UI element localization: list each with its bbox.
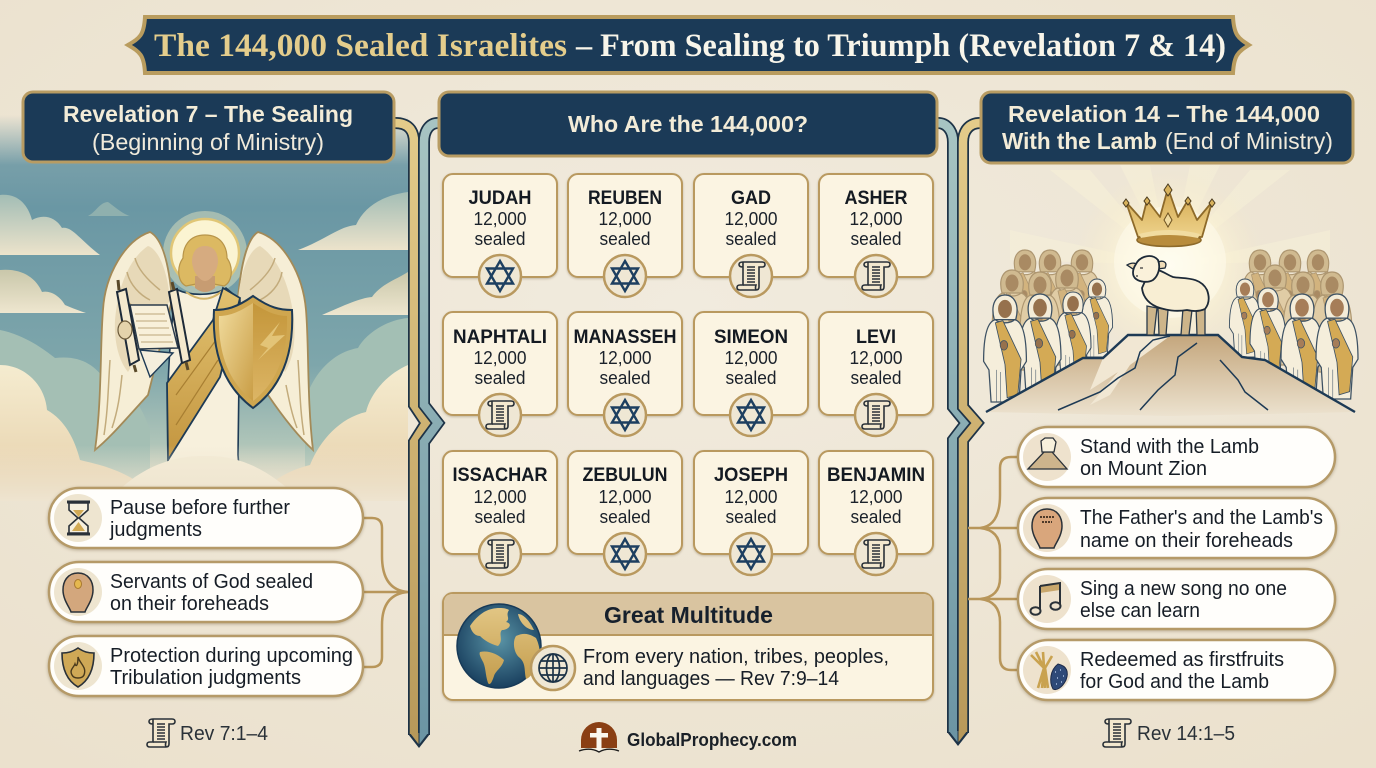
card: Simeon: 12,000 bbox=[724, 347, 778, 368]
left bullet list bbox=[49, 488, 363, 696]
card: Reuben: 12,000 bbox=[598, 208, 652, 229]
left divider pillar bbox=[395, 123, 438, 748]
card: Gad: sealed bbox=[726, 228, 776, 249]
item: stand with the Lamb: on Mount Zion bbox=[1080, 458, 1207, 480]
item: pause before judgments: Pause before further bbox=[110, 497, 290, 519]
title banner bbox=[128, 17, 1249, 73]
card: Joseph bbox=[694, 451, 808, 575]
reference: Rev 7:1-4 bbox=[147, 719, 268, 747]
card: Issachar bbox=[443, 451, 557, 575]
left sky scene bbox=[0, 115, 408, 501]
card: Asher: sealed bbox=[850, 228, 902, 249]
item: stand with the Lamb: Stand with the Lamb bbox=[1080, 436, 1259, 458]
item: protection: Protection during upcoming bbox=[110, 645, 353, 667]
back row crowd left bbox=[992, 250, 1101, 372]
card: Manasseh: 12,000 bbox=[598, 347, 652, 368]
left header: Revelation 7 bbox=[23, 92, 394, 162]
hair and face bbox=[179, 235, 231, 286]
card: Levi: sealed bbox=[850, 367, 902, 388]
icon: earth globe bbox=[457, 604, 541, 688]
item: names on foreheads: The Father's and the Lamb's bbox=[1080, 507, 1323, 529]
right header: Revelation 14: Revelation 14 – The 144,000 bbox=[1008, 101, 1320, 127]
right header: Revelation 14: (End of Ministry) bbox=[1165, 128, 1333, 154]
item: new song bbox=[1018, 569, 1335, 629]
item: firstfruits: for God and the Lamb bbox=[1080, 671, 1269, 693]
card: Reuben bbox=[568, 174, 682, 297]
item: new song: Sing a new song no one bbox=[1080, 578, 1287, 600]
illustration: lamb on Mount Zion with crown and redeemed crowd bbox=[984, 165, 1358, 416]
card: Zebulun bbox=[568, 451, 682, 575]
card: Gad: GAD bbox=[731, 188, 771, 209]
card: Benjamin: 12,000 bbox=[850, 486, 902, 507]
icon: shield with flame bbox=[62, 648, 94, 687]
item: names on foreheads: name on their foreheads bbox=[1080, 530, 1293, 552]
card: Naphtali: NAPHTALI bbox=[453, 327, 547, 348]
lamb bbox=[1127, 256, 1209, 335]
card: Naphtali: 12,000 bbox=[474, 347, 526, 368]
icon: lamb on mountain bbox=[1028, 438, 1067, 469]
card: Simeon: sealed bbox=[726, 367, 776, 388]
item: protection: Tribulation judgments bbox=[110, 667, 301, 689]
icon: music notes bbox=[1030, 583, 1060, 615]
front row crowd left bbox=[984, 279, 1113, 402]
title text: gold part: The 144,000 Sealed Israelites bbox=[154, 28, 567, 64]
front row crowd right bbox=[1229, 279, 1358, 399]
illustration: angel with scroll and shield bbox=[95, 211, 313, 500]
panel: Great Multitude: From every nation, tribes, peoples, bbox=[583, 646, 889, 668]
panel: Great Multitude: Great Multitude bbox=[604, 602, 773, 628]
card: Gad bbox=[694, 174, 808, 297]
sun rays bbox=[1010, 165, 1330, 360]
mountain bbox=[986, 335, 1355, 416]
item: names on foreheads bbox=[1018, 498, 1336, 558]
card: Reuben: sealed bbox=[600, 228, 650, 249]
robe bbox=[168, 288, 240, 480]
front cloud bbox=[110, 456, 300, 500]
icon: small globe bbox=[531, 646, 575, 690]
card: Levi: 12,000 bbox=[850, 347, 902, 368]
item: stand with the Lamb bbox=[1018, 427, 1335, 487]
item: firstfruits: Redeemed as firstfruits bbox=[1080, 649, 1284, 671]
item: pause before judgments: judgments bbox=[109, 519, 202, 541]
card: Joseph: JOSEPH bbox=[714, 465, 788, 486]
card: Issachar: 12,000 bbox=[474, 486, 526, 507]
card: Manasseh: sealed bbox=[600, 367, 650, 388]
item: protection bbox=[49, 636, 363, 696]
card: Zebulun: 12,000 bbox=[598, 486, 652, 507]
card: Judah: sealed bbox=[474, 228, 526, 249]
left branch connectors bbox=[363, 518, 408, 667]
back row crowd right bbox=[1241, 250, 1352, 372]
left header: Revelation 7: Revelation 7 – The Sealing bbox=[63, 101, 353, 127]
card: Joseph: 12,000 bbox=[724, 486, 778, 507]
logo: GlobalProphecy.com: GlobalProphecy.com bbox=[627, 730, 797, 750]
reference: Rev 14:1-5 bbox=[1103, 719, 1235, 747]
item: pause before judgments bbox=[49, 488, 363, 548]
card: Naphtali: sealed bbox=[474, 367, 526, 388]
item: servants sealed: on their foreheads bbox=[110, 593, 269, 615]
card: Benjamin: BENJAMIN bbox=[827, 465, 925, 486]
center header: Who Are the 144,000: Who Are the 144,000? bbox=[568, 111, 808, 137]
card: Asher: 12,000 bbox=[850, 208, 902, 229]
card: Reuben: REUBEN bbox=[588, 188, 662, 209]
right divider pillar bbox=[938, 123, 980, 746]
icon: hourglass bbox=[67, 502, 90, 534]
right wing bbox=[238, 232, 313, 450]
card: Simeon bbox=[694, 312, 808, 436]
item: firstfruits bbox=[1018, 640, 1335, 700]
card: Judah: JUDAH bbox=[468, 188, 532, 209]
right header: Revelation 14 bbox=[981, 92, 1353, 163]
card: Simeon: SIMEON bbox=[714, 327, 788, 348]
panel: Great Multitude bbox=[443, 593, 933, 700]
right branch connectors bbox=[968, 457, 1018, 670]
center header: Who Are the 144,000 bbox=[439, 92, 937, 156]
card: Benjamin bbox=[819, 451, 933, 575]
card: Asher bbox=[819, 174, 933, 297]
card: Gad: 12,000 bbox=[724, 208, 778, 229]
card: Issachar: sealed bbox=[474, 506, 526, 527]
card: Benjamin: sealed bbox=[850, 506, 902, 527]
right bullet list bbox=[1018, 427, 1336, 700]
card: Zebulun: sealed bbox=[600, 506, 650, 527]
card: Naphtali bbox=[443, 312, 557, 436]
right header: Revelation 14: With the Lamb bbox=[1002, 128, 1157, 154]
card: Levi: LEVI bbox=[856, 327, 896, 348]
card: Joseph: sealed bbox=[726, 506, 776, 527]
panel: Great Multitude: and languages — Rev 7:9–14 bbox=[583, 668, 839, 690]
card: Asher: ASHER bbox=[844, 188, 908, 209]
item: servants sealed bbox=[49, 562, 363, 622]
reference: Rev 7:1-4: Rev 7:1–4 bbox=[180, 723, 268, 745]
icon: head with name on forehead bbox=[1032, 509, 1062, 548]
card: Judah: 12,000 bbox=[474, 208, 526, 229]
crown bbox=[1123, 184, 1215, 246]
left header: Revelation 7: (Beginning of Ministry) bbox=[92, 129, 324, 155]
title text: white part: – From Sealing to Triumph (Revelation 7 & 14) bbox=[575, 28, 1226, 64]
halo bbox=[163, 211, 247, 295]
card: Issachar: ISSACHAR bbox=[452, 465, 548, 486]
card: Manasseh: MANASSEH bbox=[574, 327, 676, 348]
item: new song: else can learn bbox=[1080, 600, 1200, 622]
scroll in hand bbox=[140, 350, 173, 377]
icon: wheat and grapes bbox=[1031, 652, 1067, 690]
item: servants sealed: Servants of God sealed bbox=[110, 571, 313, 593]
icon: head with forehead seal bbox=[63, 573, 93, 612]
left wing bbox=[95, 232, 172, 450]
card: Judah bbox=[443, 174, 557, 297]
card: Levi bbox=[819, 312, 933, 436]
card: Zebulun: ZEBULUN bbox=[582, 465, 668, 486]
shield bbox=[214, 296, 292, 408]
clouds behind angel bbox=[0, 192, 408, 500]
logo: GlobalProphecy.com bbox=[579, 722, 797, 752]
reference: Rev 14:1-5: Rev 14:1–5 bbox=[1137, 723, 1235, 745]
sky fade to parchment bbox=[0, 445, 408, 501]
card: Manasseh bbox=[568, 312, 682, 436]
sash bbox=[167, 288, 240, 460]
tribe cards grid bbox=[443, 174, 933, 575]
